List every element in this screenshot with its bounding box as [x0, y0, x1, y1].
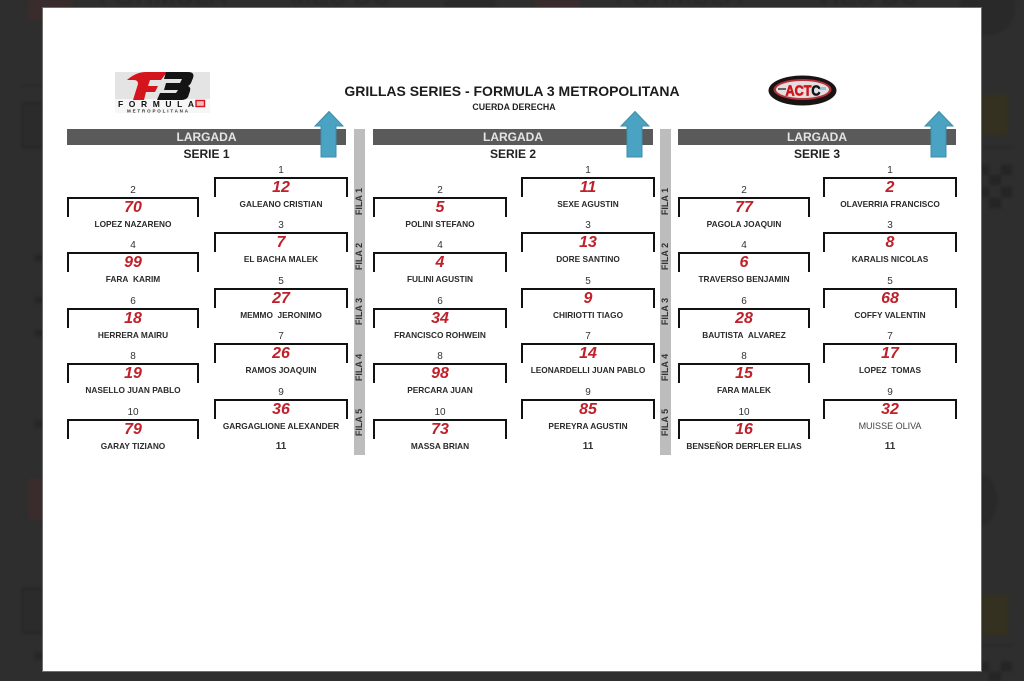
grid slot: serie 3 pos 2: [678, 185, 810, 229]
grid slot: serie 1 pos 8: 8: [130, 351, 136, 362]
grid slot: serie 1 pos 4: FARA KARIM: [106, 274, 160, 284]
grid slot: serie 3 pos 5: 5: [887, 276, 893, 287]
header bar: largada serie 1: LARGADA: [176, 130, 236, 144]
grid slot: serie 2 pos 5: 5: [585, 276, 591, 287]
grid slot: serie 3 pos 7: 17: [881, 345, 899, 362]
grid slot: serie 2 pos 10: [373, 407, 507, 451]
grid slot: serie 2 pos 9: 9: [585, 387, 591, 398]
grid slot: serie 2 pos 3: 13: [579, 234, 597, 251]
grid slot: serie 3 pos 4: [678, 240, 810, 284]
grid slot: serie 2 pos 3: [521, 220, 655, 264]
grid slot: serie 3 pos 3: KARALIS NICOLAS: [852, 254, 928, 264]
grid slot: serie 3 pos 7: LOPEZ TOMAS: [859, 365, 921, 375]
grid slot: serie 1 pos 1: 12: [272, 179, 290, 196]
grid slot: serie 3 pos 1: [823, 165, 957, 209]
grid slot: serie 2 pos 7: 7: [585, 331, 591, 342]
grid slot: serie 3 pos 6: 28: [735, 310, 753, 327]
grid slot: serie 2 pos 5: [521, 276, 655, 320]
grid slot: serie 3 pos 2: 2: [741, 185, 747, 196]
grid slot: serie 1 pos 6: 6: [130, 296, 136, 307]
grid slot: serie 2 pos 9: [521, 387, 655, 431]
grid slot: serie 2 pos 2: 5: [436, 199, 444, 216]
grid slot: serie 1 pos 1: [214, 165, 348, 209]
grid slot: serie 1 pos 1: GALEANO CRISTIAN: [240, 199, 322, 209]
grid slot: serie 3 pos 5: COFFY VALENTIN: [854, 310, 926, 320]
header bar: largada serie 3: LARGADA: [787, 130, 847, 144]
grid slot: serie 3 pos 4: 6: [740, 254, 748, 271]
header bar: largada serie 1: [67, 129, 346, 145]
grid slot: serie 2 pos 3: 3: [585, 220, 591, 231]
grid slot: serie 3 pos 9: [823, 387, 957, 431]
grid slot: serie 1 pos 10: 10: [127, 407, 139, 418]
grid slot: serie 1 pos 2: 2: [130, 185, 136, 196]
grid slot: serie 1 pos 3: [214, 220, 348, 264]
grid slot: serie 2 pos 6: [373, 296, 507, 340]
grid slot: serie 1 pos 8: 19: [124, 365, 142, 382]
grid slot: serie 1 pos 6: [67, 296, 199, 340]
grid slot: serie 2 pos 2: [373, 185, 507, 229]
grid slot: serie 3 pos 4: TRAVERSO BENJAMIN: [698, 274, 790, 284]
grid slot: serie 2 pos 6: 6: [437, 296, 443, 307]
grid slot: serie 2 pos 4: 4: [436, 254, 444, 271]
grid slot: serie 2 pos 8: [373, 351, 507, 395]
grid slot: serie 3 pos 9: 9: [887, 387, 893, 398]
grid slot: serie 2 pos 6: FRANCISCO ROHWEIN: [394, 330, 486, 340]
grid slot: serie 3 pos 7: [823, 331, 957, 375]
grid slot: serie 1 pos 10: GARAY TIZIANO: [101, 441, 165, 451]
row strip: filas between serie 1 and 2: FILA 5: [354, 409, 364, 436]
row strip: filas between serie 2 and 3: FILA 4: [660, 354, 670, 381]
logo: ACTC: ACTC: [786, 82, 821, 100]
grid slot: serie 1 pos 5: MEMMO JERONIMO: [240, 310, 322, 320]
row strip: filas between serie 1 and 2: FILA 3: [354, 298, 364, 325]
logo: Formula 3 Metropolitana: FORMULA: [118, 99, 194, 109]
grid slot: serie 1 pos 9: GARGAGLIONE ALEXANDER: [223, 421, 339, 431]
position label: serie 1 pos 11: 11: [276, 441, 286, 452]
grid slot: serie 2 pos 7: LEONARDELLI JUAN PABLO: [531, 365, 645, 375]
heading: serie 3: SERIE 3: [794, 147, 840, 161]
grid slot: serie 3 pos 9: 32: [881, 401, 899, 418]
grid slot: serie 2 pos 6: 34: [431, 310, 449, 327]
row strip: filas between serie 2 and 3: FILA 2: [660, 243, 670, 270]
grid slot: serie 3 pos 5: 68: [881, 290, 899, 307]
logo: ACTC: [768, 76, 836, 106]
grid slot: serie 3 pos 5: [823, 276, 957, 320]
arrow: direction serie 2: [620, 111, 650, 158]
row strip: filas between serie 2 and 3: FILA 5: [660, 409, 670, 436]
grid slot: serie 1 pos 6: HERRERA MAIRU: [98, 330, 168, 340]
header bar: largada serie 2: [373, 129, 653, 145]
grid slot: serie 2 pos 10: MASSA BRIAN: [411, 441, 469, 451]
grid slot: serie 3 pos 8: 15: [735, 365, 753, 382]
grid slot: serie 1 pos 9: 36: [272, 401, 290, 418]
row strip: filas between serie 2 and 3: [660, 129, 671, 455]
grid slot: serie 3 pos 10: BENSEÑOR DERFLER ELIAS: [686, 441, 802, 451]
grid slot: serie 2 pos 1: 1: [585, 165, 591, 176]
grid slot: serie 2 pos 4: FULINI AGUSTIN: [407, 274, 473, 284]
grid slot: serie 2 pos 9: 85: [579, 401, 597, 418]
grid slot: serie 3 pos 3: 3: [887, 220, 893, 231]
subtitle: CUERDA DERECHA: [472, 102, 556, 112]
heading: serie 1: SERIE 1: [183, 147, 230, 161]
logo: Formula 3 Metropolitana: [115, 72, 210, 113]
grid slot: serie 1 pos 2: LOPEZ NAZARENO: [94, 219, 171, 229]
grid slot: serie 1 pos 9: [214, 387, 348, 431]
grid slot: serie 1 pos 8: [67, 351, 199, 395]
grid slot: serie 1 pos 7: 26: [272, 345, 290, 362]
row strip: filas between serie 1 and 2: [354, 129, 365, 455]
grid slot: serie 3 pos 1: 2: [886, 179, 894, 196]
grid slot: serie 2 pos 8: 98: [431, 365, 449, 382]
grid slot: serie 2 pos 10: 10: [434, 407, 446, 418]
heading: serie 2: SERIE 2: [490, 147, 536, 161]
grid slot: serie 3 pos 6: 6: [741, 296, 747, 307]
grid slot: serie 1 pos 2: 70: [124, 199, 142, 216]
grid slot: serie 3 pos 4: 4: [741, 240, 747, 251]
arrow: direction serie 1: [314, 111, 344, 158]
position label: serie 3 pos 11: 11: [885, 441, 895, 452]
grid slot: serie 2 pos 3: DORE SANTINO: [556, 254, 620, 264]
grid slot: serie 2 pos 8: 8: [437, 351, 443, 362]
grid slot: serie 1 pos 7: [214, 331, 348, 375]
position label: serie 2 pos 11: 11: [583, 441, 593, 452]
grid slot: serie 2 pos 2: POLINI STEFANO: [405, 219, 475, 229]
title: GRILLAS SERIES - FORMULA 3 METROPOLITANA: [344, 83, 680, 99]
grid slot: serie 2 pos 9: PEREYRA AGUSTIN: [548, 421, 628, 431]
grid slot: serie 3 pos 2: PAGOLA JOAQUIN: [707, 219, 781, 229]
grid slot: serie 2 pos 4: 4: [437, 240, 443, 251]
grid slot: serie 3 pos 7: 7: [887, 331, 893, 342]
grid slot: serie 1 pos 10: [67, 407, 199, 451]
grid slot: serie 2 pos 8: PERCARA JUAN: [407, 385, 473, 395]
grid slot: serie 2 pos 2: 2: [437, 185, 443, 196]
grid slot: serie 2 pos 1: 11: [580, 179, 596, 196]
grid slot: serie 3 pos 10: 10: [738, 407, 750, 418]
header bar: largada serie 3: [678, 129, 956, 145]
row strip: filas between serie 2 and 3: FILA 1: [660, 188, 670, 215]
grid slot: serie 3 pos 9: MUISSE OLIVA: [859, 421, 921, 431]
grid slot: serie 3 pos 3: 8: [886, 234, 894, 251]
grid slot: serie 2 pos 1: SEXE AGUSTIN: [557, 199, 619, 209]
row strip: filas between serie 1 and 2: FILA 1: [354, 188, 364, 215]
grid slot: serie 3 pos 3: [823, 220, 957, 264]
grid slot: serie 3 pos 8: [678, 351, 810, 395]
grid slot: serie 1 pos 7: 7: [278, 331, 284, 342]
grid slot: serie 1 pos 4: [67, 240, 199, 284]
grid slot: serie 1 pos 9: 9: [278, 387, 284, 398]
grid slot: serie 1 pos 3: EL BACHA MALEK: [244, 254, 318, 264]
row strip: filas between serie 2 and 3: FILA 3: [660, 298, 670, 325]
grid slot: serie 3 pos 6: [678, 296, 810, 340]
grid slot: serie 3 pos 10: 16: [735, 421, 753, 438]
header bar: largada serie 2: LARGADA: [483, 130, 543, 144]
grid slot: serie 2 pos 7: 14: [579, 345, 597, 362]
grid slot: serie 1 pos 8: NASELLO JUAN PABLO: [85, 385, 181, 395]
grid slot: serie 1 pos 5: 27: [272, 290, 290, 307]
grid slot: serie 1 pos 4: 4: [130, 240, 136, 251]
grid slot: serie 1 pos 3: 7: [277, 234, 285, 251]
grid slot: serie 3 pos 1: OLAVERRIA FRANCISCO: [840, 199, 940, 209]
grid slot: serie 2 pos 7: [521, 331, 655, 375]
grid slot: serie 3 pos 8: 8: [741, 351, 747, 362]
grid slot: serie 1 pos 7: RAMOS JOAQUIN: [246, 365, 316, 375]
grid slot: serie 2 pos 5: CHIRIOTTI TIAGO: [553, 310, 623, 320]
grid slot: serie 3 pos 1: 1: [887, 165, 893, 176]
grid slot: serie 1 pos 4: 99: [124, 254, 142, 271]
grid slot: serie 2 pos 10: 73: [431, 421, 449, 438]
grid slot: serie 2 pos 1: [521, 165, 655, 209]
grid slot: serie 2 pos 4: [373, 240, 507, 284]
grid slot: serie 1 pos 10: 79: [124, 421, 142, 438]
row strip: filas between serie 1 and 2: FILA 4: [354, 354, 364, 381]
grid slot: serie 3 pos 6: BAUTISTA ALVAREZ: [702, 330, 786, 340]
grid slot: serie 3 pos 2: 77: [735, 199, 753, 216]
grid slot: serie 1 pos 6: 18: [124, 310, 142, 327]
grid slot: serie 1 pos 5: 5: [278, 276, 284, 287]
grid slot: serie 1 pos 5: [214, 276, 348, 320]
grid slot: serie 1 pos 3: 3: [278, 220, 284, 231]
grid slot: serie 3 pos 10: [678, 407, 810, 451]
grid slot: serie 1 pos 2: [67, 185, 199, 229]
grid slot: serie 1 pos 1: 1: [278, 165, 284, 176]
row strip: filas between serie 1 and 2: FILA 2: [354, 243, 364, 270]
grid slot: serie 3 pos 8: FARA MALEK: [717, 385, 771, 395]
arrow: direction serie 3: [924, 111, 954, 158]
grid slot: serie 2 pos 5: 9: [584, 290, 592, 307]
